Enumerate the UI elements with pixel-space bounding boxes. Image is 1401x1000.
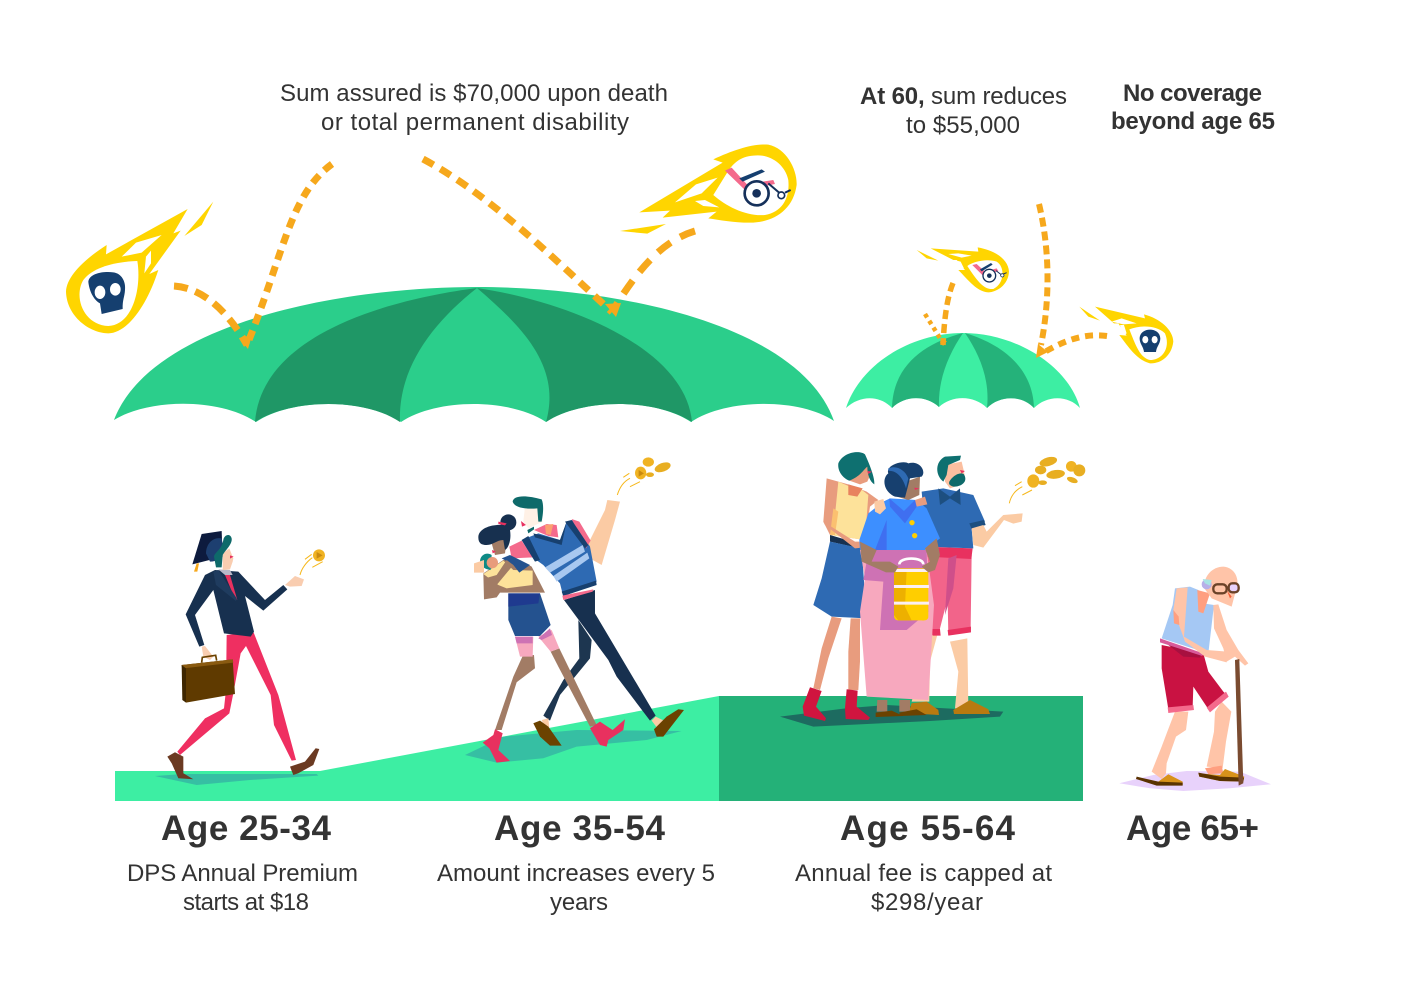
- caption: at 60: [860, 83, 1067, 139]
- man arm: [587, 500, 620, 565]
- figure: graduate age 25-34: [155, 531, 325, 785]
- column label: age 25-34: starts at $18: [183, 889, 309, 916]
- man front leg: [564, 590, 656, 721]
- arrow: small wheelchair to small umbrella: [925, 283, 953, 346]
- column label: age 55-64: Annual fee is capped at: [795, 860, 1052, 887]
- column label: age 35-54: [437, 809, 715, 916]
- figure: couple with baby age 35-54: [465, 457, 684, 763]
- arrow: small skull to small umbrella: [1036, 204, 1107, 358]
- caption: at 60: At 60, sum reduces: [860, 83, 1067, 110]
- icon: wheelchair comet small: [917, 247, 1009, 292]
- arrow: skull to large umbrella: [174, 164, 332, 349]
- column label: age 25-34: [127, 809, 358, 916]
- coins: [1027, 474, 1039, 488]
- left woman: [823, 478, 878, 540]
- bearded man legs: [912, 635, 937, 702]
- bearded man head: [945, 462, 965, 488]
- column label: age 35-54: Age 35-54: [494, 809, 666, 848]
- age labels: [127, 809, 1259, 916]
- icon: skull comet small: [1079, 307, 1173, 363]
- column label: age 55-64: $298/year: [871, 889, 983, 916]
- coins: [635, 467, 646, 479]
- caption: at 60: to $55,000: [906, 112, 1020, 139]
- bearded man shirt: [922, 488, 985, 548]
- man sweater vest: [522, 520, 597, 597]
- man head: [523, 505, 543, 528]
- icon: wheelchair comet large: [620, 144, 797, 234]
- top captions: [280, 80, 1275, 139]
- man back leg: [543, 620, 592, 721]
- caption: sum assured: or total permanent disability: [321, 109, 629, 136]
- figure: elderly man age 65+: [1119, 567, 1271, 791]
- figure: three adults age 55-64: [780, 452, 1085, 727]
- column label: age 35-54: years: [550, 889, 608, 916]
- column label: age 55-64: [795, 809, 1052, 916]
- arrow: wheelchair to large umbrella: [423, 159, 695, 317]
- ground slope: [115, 696, 1083, 801]
- small umbrella: [846, 333, 1080, 408]
- woman torso and baby: [483, 560, 545, 599]
- caption: no coverage: [1111, 80, 1275, 135]
- column label: age 25-34: DPS Annual Premium: [127, 860, 358, 887]
- caption: no coverage: No coverage: [1123, 80, 1262, 107]
- large umbrella: [114, 287, 834, 422]
- caption: sum assured: Sum assured is $70,000 upon death: [280, 80, 668, 107]
- column label: age 65+: Age 65+: [1126, 809, 1259, 848]
- centre woman: [859, 498, 940, 550]
- woman head: [492, 539, 507, 555]
- icon: skull comet large: [66, 202, 213, 333]
- caption: no coverage: beyond age 65: [1111, 108, 1275, 135]
- column label: age 35-54: Amount increases every 5: [437, 860, 715, 887]
- column label: age 25-34: Age 25-34: [161, 809, 332, 848]
- woman legs and shorts: [495, 655, 535, 730]
- caption: sum assured: [280, 80, 668, 136]
- column label: age 55-64: Age 55-64: [840, 809, 1016, 848]
